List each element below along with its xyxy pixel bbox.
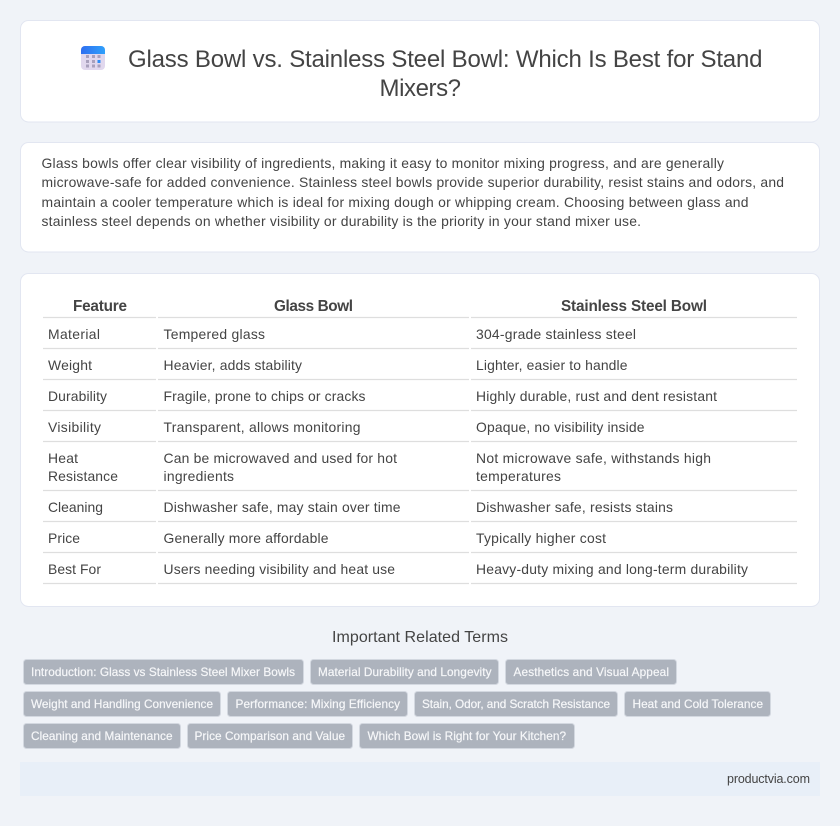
tag: Cleaning and Maintenance xyxy=(31,729,173,743)
intro text: maintain a cooler temperature which is ideal for mixing dough or whipping cream. Choosing between glass and xyxy=(42,194,748,210)
tag xyxy=(310,660,498,684)
row: heat resistance: Heat xyxy=(48,450,78,466)
row: heat resistance: Resistance xyxy=(48,468,118,484)
footer xyxy=(20,762,820,796)
tag: Introduction: Glass vs Stainless Steel Mixer Bowls xyxy=(31,665,295,679)
row: durability: Durability xyxy=(48,388,107,404)
row: price: Generally more affordable xyxy=(164,530,329,546)
table header xyxy=(43,298,797,318)
footer: productvia.com xyxy=(727,772,810,786)
row: heat resistance: Can be microwaved and used for hot xyxy=(164,450,397,466)
row: cleaning xyxy=(43,499,797,522)
tag: Performance: Mixing Efficiency xyxy=(236,697,400,711)
icon: calendar xyxy=(81,46,105,70)
related term tags xyxy=(24,660,770,748)
row: best for: Best For xyxy=(48,561,101,577)
row: cleaning: Dishwasher safe, may stain over time xyxy=(164,499,401,515)
row: weight: Heavier, adds stability xyxy=(164,357,302,373)
tag xyxy=(360,724,574,748)
panel: intro paragraph xyxy=(20,142,820,252)
row: weight: Weight xyxy=(48,357,92,373)
row: material: Material xyxy=(48,326,100,342)
table header: Feature xyxy=(73,298,127,315)
tag xyxy=(188,724,352,748)
row: visibility: Opaque, no visibility inside xyxy=(476,419,645,435)
row: best for: Users needing visibility and heat use xyxy=(164,561,395,577)
row: heat resistance: temperatures xyxy=(476,468,561,484)
row: cleaning: Dishwasher safe, resists stains xyxy=(476,499,673,515)
tag: Which Bowl is Right for Your Kitchen? xyxy=(368,729,566,743)
tag: Aesthetics and Visual Appeal xyxy=(514,665,669,679)
tag xyxy=(228,692,408,716)
row: price xyxy=(43,530,797,552)
tag: Material Durability and Longevity xyxy=(318,665,492,679)
table header: Glass Bowl xyxy=(274,298,353,315)
row: best for: Heavy-duty mixing and long-term durability xyxy=(476,561,748,577)
tag xyxy=(24,724,180,748)
table header: Stainless Steel Bowl xyxy=(561,298,707,315)
tag: Weight and Handling Convenience xyxy=(31,697,213,711)
row: durability: Highly durable, rust and dent resistant xyxy=(476,388,717,404)
row: material: Tempered glass xyxy=(164,326,265,342)
row: visibility: Visibility xyxy=(48,419,101,435)
row: visibility xyxy=(43,419,797,442)
tag xyxy=(624,692,770,716)
tag: Heat and Cold Tolerance xyxy=(632,697,763,711)
heading: related terms: Important Related Terms xyxy=(332,629,508,646)
tag xyxy=(506,660,676,684)
row: durability xyxy=(43,388,797,410)
panel: comparison table xyxy=(20,274,820,606)
tag: Stain, Odor, and Scratch Resistance xyxy=(422,697,610,711)
intro text: microwave-safe for added convenience. Stainless steel bowls provide superior durability, resist stains and odors, and xyxy=(42,174,784,190)
title: Mixers? xyxy=(380,75,461,102)
tag xyxy=(414,692,618,716)
title: Glass Bowl vs. Stainless Steel Bowl: Which Is Best for Stand xyxy=(128,46,762,73)
row: durability: Fragile, prone to chips or cracks xyxy=(164,388,366,404)
row: material xyxy=(43,326,797,348)
tag xyxy=(24,660,304,684)
row: price: Price xyxy=(48,530,80,546)
intro text: stainless steel depends on whether visibility or durability is the priority in your stand mixer use. xyxy=(42,213,641,229)
row: best for xyxy=(43,561,797,584)
row: price: Typically higher cost xyxy=(476,530,606,546)
tag: Price Comparison and Value xyxy=(194,729,345,743)
row: weight xyxy=(43,357,797,380)
row: cleaning: Cleaning xyxy=(48,499,103,515)
title xyxy=(128,46,762,102)
intro text xyxy=(42,155,784,229)
header panel xyxy=(20,20,820,122)
row: visibility: Transparent, allows monitoring xyxy=(164,419,360,435)
row: heat resistance: Not microwave safe, withstands high xyxy=(476,450,711,466)
row: weight: Lighter, easier to handle xyxy=(476,357,628,373)
row: heat resistance: ingredients xyxy=(164,468,234,484)
intro text: Glass bowls offer clear visibility of ingredients, making it easy to monitor mixing progress, and are generally xyxy=(42,155,724,171)
tag xyxy=(24,692,220,716)
row: material: 304-grade stainless steel xyxy=(476,326,636,342)
row: heat resistance xyxy=(43,450,797,490)
